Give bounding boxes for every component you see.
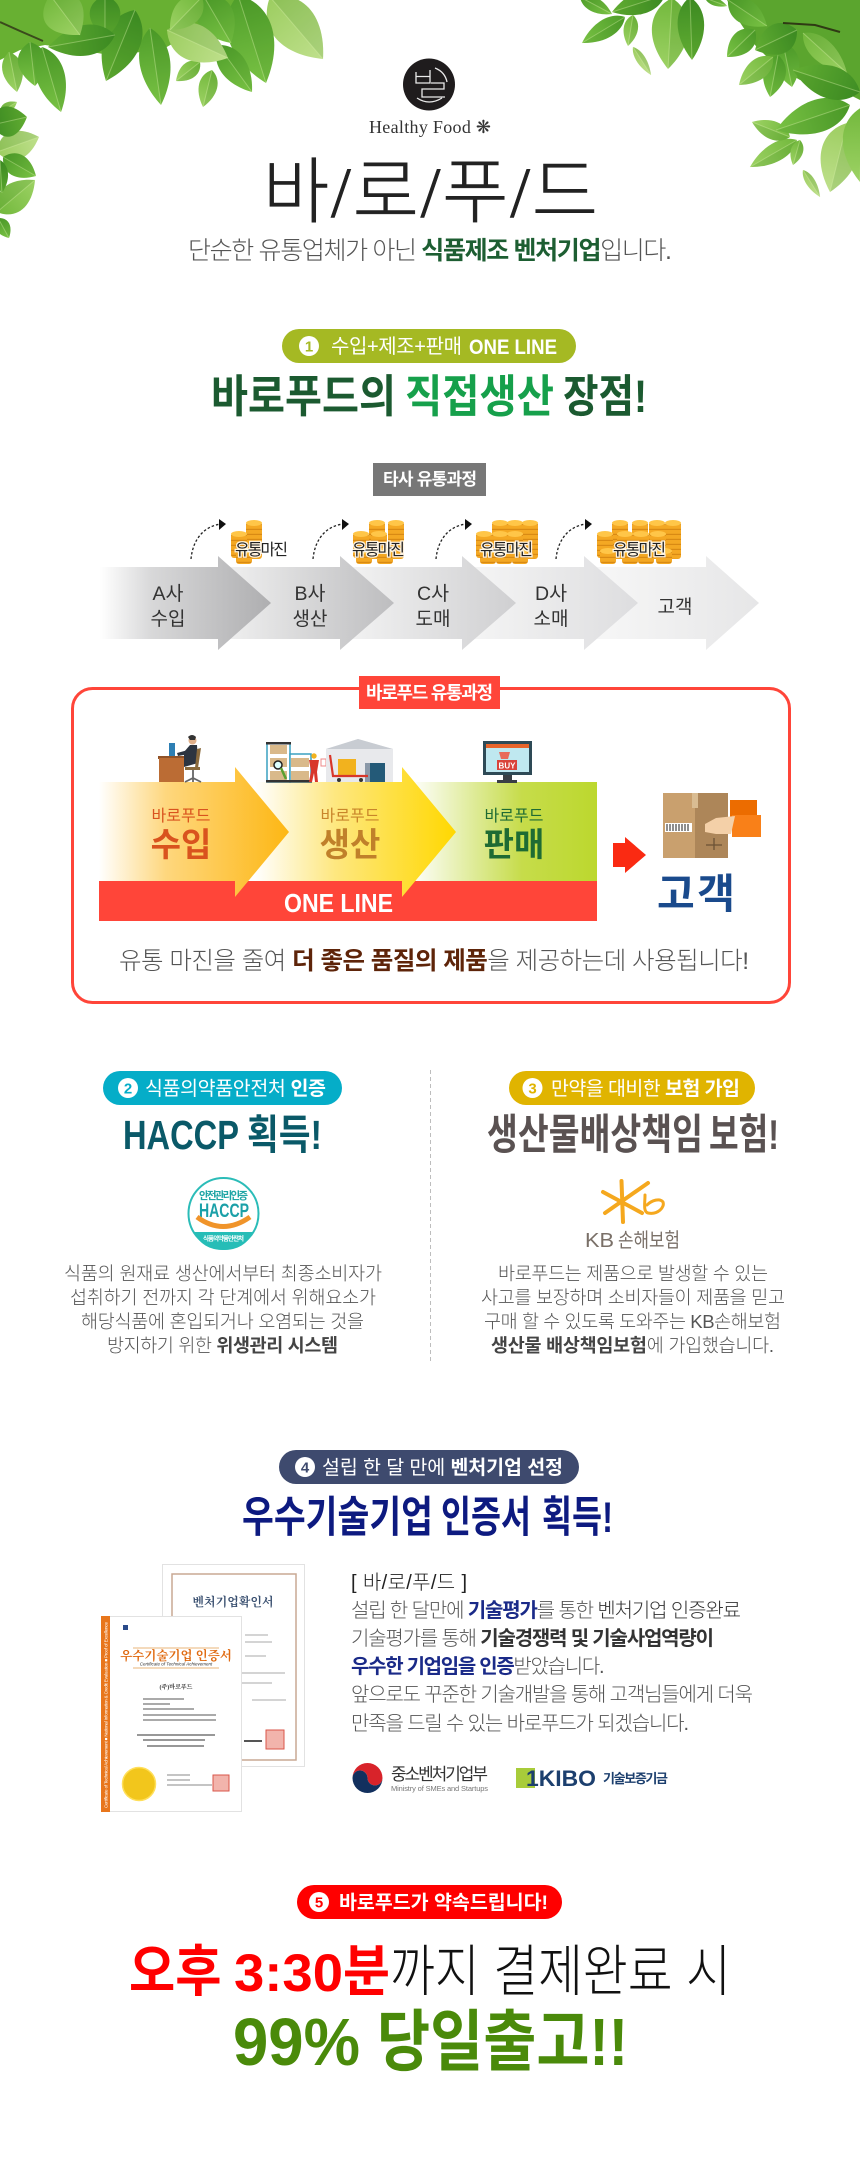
- section 4 heading: 획득!: [542, 1494, 613, 1542]
- icon: HACCP badge: 안전관리인증: [199, 1189, 248, 1202]
- chart: other company distribution arrows: D사: [535, 583, 567, 605]
- section 1 badge: 수입+제조+판매: [331, 335, 462, 358]
- logo: Ministry of SMEs and Startups: Ministry of SMEs and Startups: [391, 1784, 488, 1793]
- section 1 heading: 바로푸드의: [211, 371, 396, 422]
- arrow: dotted margin arrow 4: [556, 519, 592, 559]
- stage: sales band: [410, 782, 597, 881]
- badge 2: 식품의약품안전처 인증: [145, 1078, 326, 1100]
- icon: online shop monitor: BUY: [499, 762, 516, 770]
- stage: sales band: 바로푸드: [485, 807, 543, 825]
- logo: Ministry of SMEs and Startups: [352, 1762, 488, 1794]
- bar: one line: ONE LINE: [284, 888, 393, 918]
- badge 2: 2: [124, 1080, 132, 1098]
- HACCP description: 식품의 원재료 생산에서부터 최종소비자가: [64, 1263, 382, 1284]
- badge 3: 3: [528, 1080, 537, 1098]
- chart: other company distribution arrows: [100, 556, 759, 650]
- section 4 badge: 4: [301, 1460, 310, 1476]
- promise line 2: 99%: [233, 2005, 360, 2080]
- section 5 badge: 5: [315, 1894, 323, 1912]
- promise line 1: 오후: [129, 1940, 222, 2003]
- certificate: technology award: 우수기술기업 인증서: [120, 1648, 232, 1663]
- logo: KIBO: 기술보증기금: [603, 1771, 668, 1786]
- icon: coin stack margin 1: 유통마진: [235, 541, 288, 559]
- badge 3: [509, 1071, 755, 1105]
- chart: other company distribution arrows: 소매: [534, 608, 568, 630]
- section 5 badge: 바로푸드가 약속드립니다!: [339, 1892, 548, 1914]
- chart: other company distribution arrows: 고객: [658, 596, 692, 618]
- insurance description: 사고를 보장하며 소비자들이 제품을 믿고: [481, 1287, 785, 1308]
- arrow: dotted margin arrow 2: [313, 519, 349, 559]
- icon: coin stack margin 3: [476, 520, 538, 564]
- insurance description: 생산물 배상책임보험에 가입했습니다.: [491, 1335, 774, 1356]
- KB text: KB: [585, 1230, 614, 1252]
- title: 바/로/푸/드: [263, 153, 598, 233]
- stage: purchasing arrow: 바로푸드: [152, 807, 210, 825]
- leaves: left edge foliage: [0, 98, 44, 241]
- label: other company distribution: 타사 유통과정: [383, 470, 477, 489]
- section 4 badge: 설립 한 달 만에 벤처기업 선정: [322, 1457, 563, 1479]
- promise line 2: [233, 2005, 628, 2080]
- subtitle: 단순한 유통업체가 아닌 식품제조 벤처기업입니다.: [188, 237, 672, 265]
- leaves: top left foliage: [0, 0, 340, 116]
- HACCP heading: 획득!: [247, 1112, 322, 1158]
- certificate description: 만족을 드릴 수 있는 바로푸드가 되겠습니다.: [351, 1712, 689, 1735]
- icon: HACCP badge: 식품의약품안전처: [203, 1234, 244, 1242]
- icon: KB logo: [603, 1181, 663, 1222]
- arrow: red to customer: [613, 837, 646, 873]
- KB text: [585, 1229, 680, 1252]
- stage: production arrow: 바로푸드: [321, 807, 379, 825]
- HACCP description: 해당식품에 혼입되거나 오염되는 것을: [81, 1311, 364, 1332]
- certificate description: [351, 1571, 753, 1735]
- logo: Ministry of SMEs and Startups: 중소벤처기업부: [391, 1765, 488, 1784]
- panel: insurance: [481, 1071, 785, 1356]
- HACCP heading: HACCP: [123, 1112, 239, 1158]
- insurance description: 구매 할 수 있도록 도와주는 KB손해보험: [484, 1311, 781, 1332]
- certificate description: [ 바/로/푸/드 ]: [351, 1571, 467, 1594]
- panel label: 바로푸드 유통과정: [366, 683, 493, 703]
- icon: coin stack margin 2: 유통마진: [352, 541, 405, 559]
- chart: other company distribution arrows: 도매: [416, 608, 450, 630]
- stage: production arrow: 생산: [320, 826, 380, 863]
- stage: purchasing arrow: [99, 767, 289, 897]
- icon: warehouse and shelves: [266, 739, 393, 782]
- insurance description: 바로푸드는 제품으로 발생할 수 있는: [498, 1263, 768, 1284]
- icon: coin stack margin 1: [231, 520, 288, 564]
- promise line 1: 까지 결제완료 시: [390, 1940, 731, 2003]
- promise line 1: [129, 1940, 731, 2003]
- section 4 heading: [242, 1494, 613, 1542]
- certificate description: 기술평가를 통해 기술경쟁력 및 기술사업역량이: [351, 1627, 714, 1650]
- icon: coin stack margin 4: 유통마진: [613, 541, 666, 559]
- certificate: technology award: (주)바로푸드: [160, 1683, 193, 1691]
- chart: other company distribution arrows: 수입: [151, 608, 185, 630]
- stage: purchasing arrow: 수입: [151, 826, 211, 863]
- section 1 badge: ONE LINE: [469, 336, 557, 359]
- icon: HACCP badge: [188, 1178, 258, 1250]
- section 5 badge: [297, 1885, 562, 1919]
- bar: one line: [99, 881, 597, 921]
- section 1 badge: 1: [305, 338, 313, 356]
- insurance heading: 생산물배상책임: [487, 1111, 703, 1158]
- section 4 heading: 인증서: [441, 1494, 531, 1542]
- certificate description: 설립 한 달만에 기술평가를 통한 벤처기업 인증완료: [351, 1599, 741, 1622]
- section 1 heading: [211, 371, 647, 422]
- panel: Barofood distribution: [72, 676, 790, 1002]
- icon: coin stack margin 3: 유통마진: [480, 541, 533, 559]
- certificate: technology award: Certificate of Technical Achievement ■ National Information & Credit Evaluation ■ Proof of Excellence: [104, 1622, 108, 1808]
- insurance description: [481, 1263, 785, 1356]
- chart: other company distribution arrows: C사: [417, 583, 449, 605]
- label: customer: 고객: [657, 871, 735, 917]
- panel note: 유통 마진을 줄여 더 좋은 품질의 제품을 제공하는데 사용됩니다!: [119, 947, 749, 975]
- icon: coin stack margin 2: [352, 520, 405, 564]
- logo: KIBO: [516, 1766, 668, 1791]
- HACCP description: 섭취하기 전까지 각 단계에서 위해요소가: [70, 1287, 376, 1308]
- promise line 2: 당일출고!!: [377, 2005, 628, 2080]
- logo: KIBO: 1KIBO: [526, 1766, 596, 1791]
- insurance heading: 보험!: [709, 1111, 779, 1158]
- HACCP description: 방지하기 위한 위생관리 시스템: [107, 1335, 338, 1356]
- icon: HACCP badge: HACCP: [199, 1201, 249, 1222]
- certificate: venture confirmation: 벤처기업확인서: [192, 1594, 274, 1609]
- arrow: dotted margin arrow 3: [436, 519, 472, 559]
- promise line 1: 분: [343, 1940, 390, 2003]
- section 1 heading: 직접생산: [405, 371, 554, 422]
- promise line 1: 3:30: [234, 1944, 343, 2003]
- chart: other company distribution arrows: B사: [295, 583, 326, 605]
- panel label: [359, 676, 500, 709]
- logo: Healthy Food emblem: [403, 58, 455, 110]
- arrow: dotted margin arrow 1: [191, 519, 226, 559]
- chart: other company distribution arrows: A사: [153, 583, 184, 605]
- logo text: Healthy Food ❋: [369, 117, 491, 137]
- divider: [430, 1070, 432, 1363]
- icon: parcel in hand: [663, 793, 761, 858]
- icon: coin stack margin 4: [597, 520, 681, 564]
- section 1 badge: [282, 329, 576, 363]
- certificate: technology award: Certificate of Technical Achievement: [140, 1662, 213, 1666]
- label: other company distribution: [373, 463, 486, 496]
- section 4 heading: 우수기술기업: [242, 1494, 433, 1542]
- icon: office worker: [158, 735, 201, 782]
- stage: sales band: 판매: [484, 826, 544, 863]
- badge 2: [103, 1071, 342, 1105]
- section 1 heading: 장점!: [563, 371, 647, 422]
- panel: HACCP: [64, 1071, 382, 1356]
- certificate description: 앞으로도 꾸준한 기술개발을 통해 고객님들에게 더욱: [351, 1683, 753, 1706]
- certificate: technology award: [101, 1616, 242, 1812]
- icon: online shop monitor: [483, 741, 532, 783]
- leaves: top right foliage: [577, 0, 860, 100]
- chart: other company distribution arrows: 생산: [293, 608, 327, 630]
- certificate: venture confirmation: [162, 1564, 304, 1766]
- leaves: right side foliage: [745, 54, 860, 199]
- stage: production arrow: [255, 767, 456, 897]
- KB text: 손해보험: [618, 1229, 680, 1252]
- section 4 badge: [279, 1450, 579, 1484]
- badge 3: 만약을 대비한 보험 가입: [551, 1078, 740, 1100]
- HACCP description: [64, 1263, 382, 1356]
- certificate description: 우수한 기업임을 인증받았습니다.: [351, 1655, 604, 1678]
